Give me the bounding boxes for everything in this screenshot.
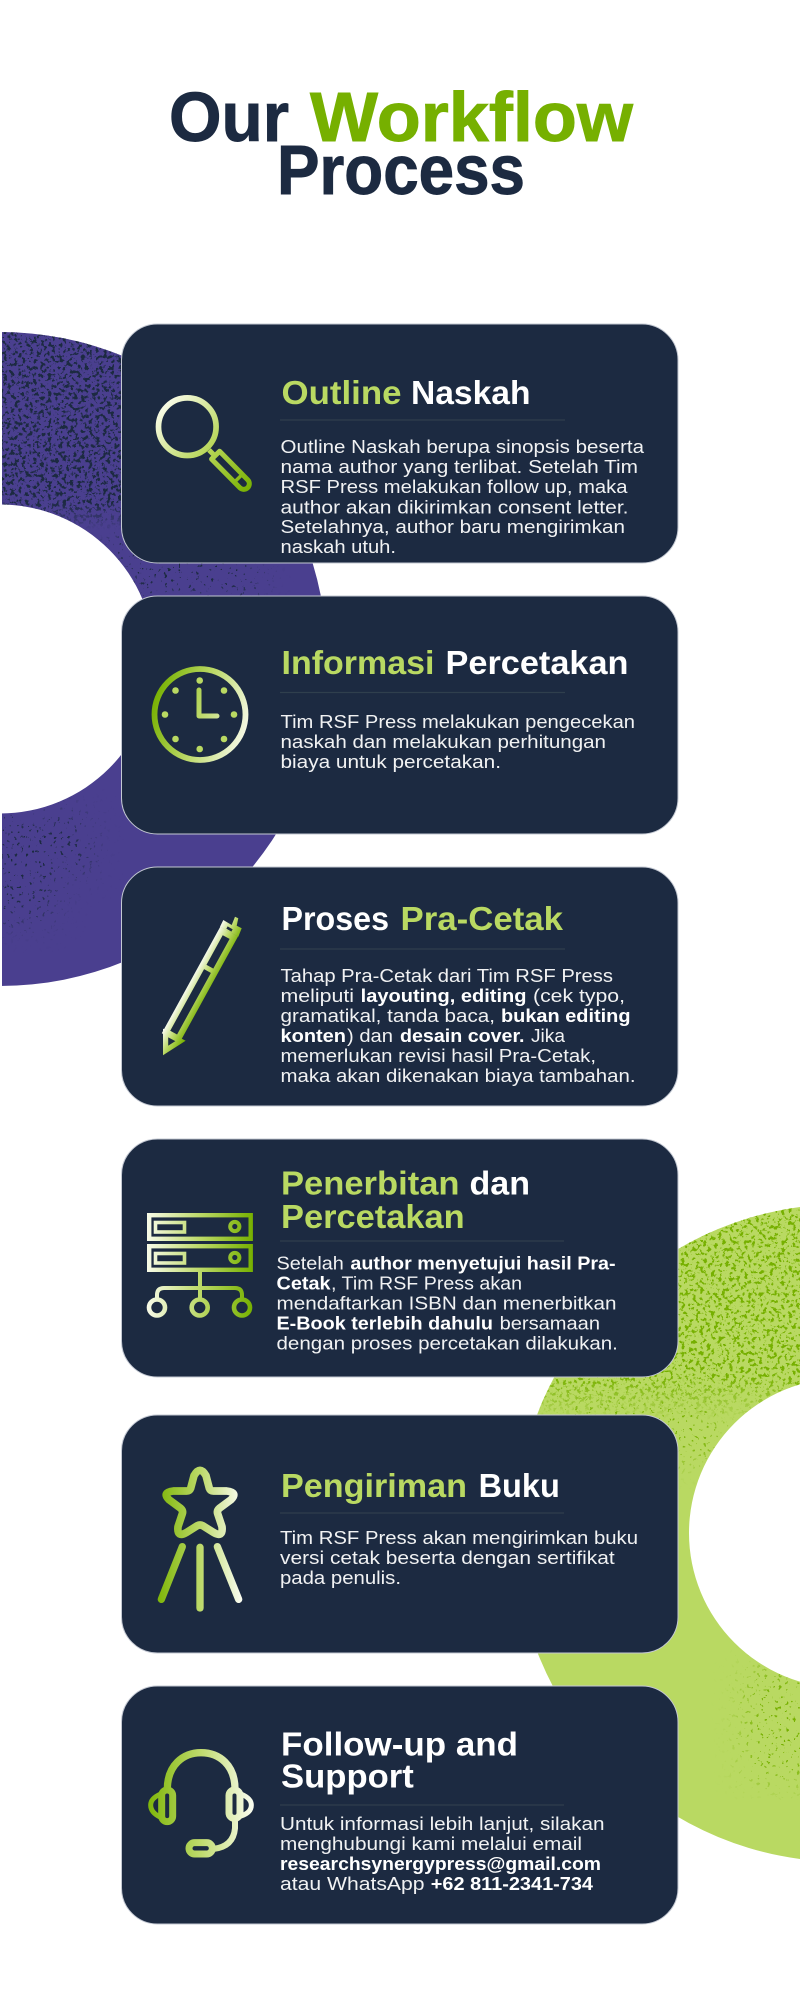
body text: dengan proses percetakan dilakukan. [276,1332,618,1354]
background: purple speckled ring [2,325,342,995]
icon: magnifying glass [158,398,249,489]
background: green speckled ring [537,1207,800,1859]
body text: nama author yang terlibat. Setelah Tim [280,456,638,477]
body text: naskah dan melakukan perhitungan [280,731,606,752]
heading: Pra-Cetak [400,900,564,937]
body text: , Tim RSF Press akan [331,1272,522,1294]
body text: konten [280,1025,346,1046]
heading: Pengiriman [281,1467,467,1504]
heading: Naskah [411,374,530,411]
body text: desain cover. [400,1025,524,1046]
body text: pada penulis. [280,1567,401,1588]
body text: author menyetujui hasil Pra- [350,1252,616,1274]
body text: RSF Press melakukan follow up, maka [280,476,628,497]
heading [282,900,564,937]
body text: menghubungi kami melalui email [280,1833,582,1854]
body text: (cek typo, [533,985,625,1006]
body text [280,711,635,772]
panel: Follow-up and Support [122,1686,678,1924]
heading [282,374,530,411]
heading: Percetakan [446,644,628,681]
body text: bukan editing [501,1005,630,1026]
panel: Proses Pra-Cetak [122,867,678,1106]
heading: dan [470,1164,530,1202]
body text [280,1527,638,1588]
heading: Buku [479,1467,560,1504]
panel: Pengiriman Buku [122,1415,678,1653]
body text: Tahap Pra-Cetak dari Tim RSF Press [280,965,613,986]
body text: Untuk informasi lebih lanjut, silakan [280,1813,604,1834]
heading: Follow-up and [281,1726,518,1762]
body text: Jika [531,1025,566,1046]
heading: Percetakan [281,1198,465,1235]
heading: Proses [282,900,389,937]
body text [276,1252,618,1354]
panel: Outline Naskah [122,324,678,563]
title: Workflow [310,78,634,156]
body text: maka akan dikenakan biaya tambahan. [280,1065,636,1086]
body text [280,965,636,1086]
icon: server network [149,1215,251,1316]
title: Our [169,78,289,156]
body text: atau WhatsApp [280,1873,424,1894]
body text: bersamaan [500,1312,600,1334]
icon: clock [154,669,246,760]
body text: Setelah [276,1252,344,1274]
body text: layouting, editing [361,985,526,1006]
body text: memerlukan revisi hasil Pra-Cetak, [280,1045,596,1066]
body text: versi cetak beserta dengan sertifikat [280,1547,615,1568]
heading [282,644,628,681]
body text: Setelahnya, author baru mengirimkan [280,516,625,537]
body text: Cetak [276,1272,331,1294]
body text: Tim RSF Press melakukan pengecekan [280,711,635,732]
body text: author akan dikirimkan consent letter. [280,496,628,518]
body text [280,436,645,557]
heading: Informasi [282,644,434,681]
body text: Tim RSF Press akan mengirimkan buku [280,1527,638,1548]
heading [281,1164,530,1235]
body text: gramatikal, tanda baca, [280,1005,495,1026]
panel: Penerbitan dan Percetakan [122,1139,678,1377]
icon: pen [166,917,242,1050]
body text: meliputi [280,985,354,1006]
body text: biaya untuk percetakan. [280,751,501,772]
body text: mendaftarkan ISBN dan menerbitkan [276,1292,616,1314]
heading: Outline [282,374,402,411]
body text: +62 811-2341-734 [431,1873,594,1894]
heading: Penerbitan [281,1164,460,1202]
panel: Informasi Percetakan [122,596,678,834]
body text: ) dan [347,1025,393,1046]
heading: Support [281,1758,414,1794]
body text: researchsynergypress@gmail.com [280,1853,601,1874]
icon: headset [151,1753,251,1854]
body text: Outline Naskah berupa sinopsis beserta [280,436,645,457]
heading [281,1726,518,1794]
body text: E-Book terlebih dahulu [276,1312,493,1334]
title [169,78,634,209]
title: Process [277,131,525,209]
body text: naskah utuh. [280,536,396,557]
icon: shooting star [161,1470,239,1608]
body text [280,1813,604,1894]
heading [281,1467,560,1504]
